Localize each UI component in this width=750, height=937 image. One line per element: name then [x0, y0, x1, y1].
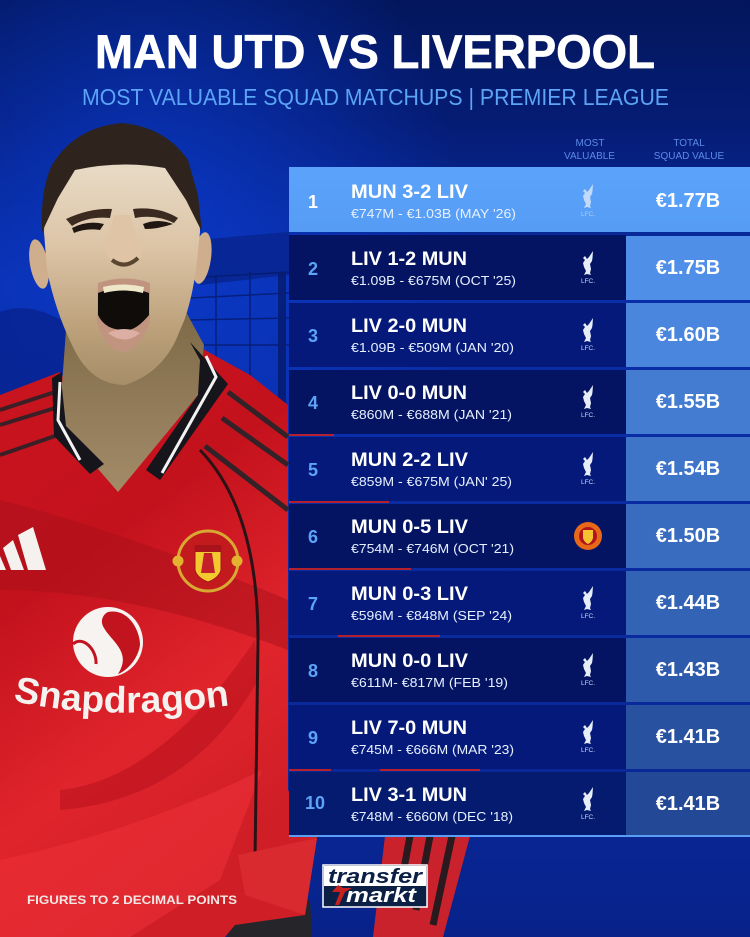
- player: ears: [26, 231, 215, 290]
- row 10: LIV 3-1 MUN: [351, 784, 467, 806]
- row 8: 8: [308, 661, 318, 681]
- column headers: TOTAL: [673, 138, 705, 149]
- row 9: €745M - €666M (MAR '23): [351, 742, 514, 757]
- row 3: €1.60B: [656, 324, 720, 346]
- subtitle: MOST VALUABLE SQUAD MATCHUPS | PREMIER LEAGUE: [82, 84, 669, 110]
- table of matchups: [289, 167, 750, 837]
- row 1: [289, 167, 750, 232]
- row 10: [289, 772, 750, 837]
- row 3: [289, 303, 750, 367]
- row 1: 1: [308, 192, 318, 212]
- title: MAN UTD VS LIVERPOOL: [95, 25, 655, 78]
- row 6: €1.50B: [656, 525, 720, 547]
- player: hair: [42, 123, 202, 232]
- column headers: SQUAD VALUE: [654, 151, 725, 162]
- row 8: [289, 638, 750, 702]
- row 5: [289, 437, 750, 501]
- column headers: [564, 138, 725, 162]
- row 3: 3: [308, 326, 318, 346]
- row 7: €596M - €848M (SEP '24): [351, 608, 512, 623]
- row 6: 6: [308, 527, 318, 547]
- row 2: LIV 1-2 MUN: [351, 248, 467, 270]
- row 2: €1.75B: [656, 257, 720, 279]
- player: brows and eyes: [66, 208, 178, 233]
- player: nose: [105, 215, 142, 262]
- row 5: 5: [308, 460, 318, 480]
- player: neck: [60, 310, 204, 492]
- player: leg: [373, 836, 470, 937]
- column headers: VALUABLE: [564, 151, 615, 162]
- row 4: [289, 370, 750, 434]
- sponsor: Snapdragon logo: [73, 607, 143, 677]
- row 10: 10: [305, 793, 325, 813]
- player: collar: [52, 342, 228, 480]
- icon: Manchester United crest: [574, 522, 602, 550]
- player: mouth: [97, 278, 150, 352]
- row 3: LIV 2-0 MUN: [351, 315, 467, 337]
- row 1: €747M - €1.03B (MAY '26): [351, 206, 516, 221]
- row 8: €1.43B: [656, 659, 720, 681]
- player: shorts: [225, 900, 312, 937]
- row 5: €859M - €675M (JAN' 25): [351, 474, 512, 489]
- row 2: [289, 235, 750, 300]
- player illustration: Snapdragon: [15, 678, 228, 719]
- row 8: €611M- €817M (FEB '19): [351, 675, 508, 690]
- row 4: €860M - €688M (JAN '21): [351, 407, 512, 422]
- row 1: €1.77B: [656, 190, 720, 212]
- footnote: FIGURES TO 2 DECIMAL POINTS: [27, 893, 237, 907]
- player: shirt: [0, 343, 317, 937]
- crest: adidas stripes: [0, 527, 46, 570]
- row 7: €1.44B: [656, 592, 720, 614]
- row 7: [289, 571, 750, 635]
- row 1: MUN 3-2 LIV: [351, 181, 468, 203]
- row 9: €1.41B: [656, 726, 720, 748]
- logo: transfermarkt: [323, 865, 427, 907]
- row 7: 7: [308, 594, 318, 614]
- logo: transfermarkt: markt: [346, 885, 418, 907]
- jersey slivers between rows: [289, 434, 480, 771]
- row 9: 9: [308, 728, 318, 748]
- crest: Manchester United: [172, 531, 242, 591]
- player: head: [44, 148, 200, 385]
- row 3: €1.09B - €509M (JAN '20): [351, 340, 514, 355]
- row 6: €754M - €746M (OCT '21): [351, 541, 514, 556]
- row 10: €1.41B: [656, 793, 720, 815]
- player illustration: [0, 123, 470, 937]
- row 5: €1.54B: [656, 458, 720, 480]
- row 2: €1.09B - €675M (OCT '25): [351, 273, 516, 288]
- column headers: MOST: [576, 138, 604, 149]
- row 7: MUN 0-3 LIV: [351, 583, 468, 605]
- row 4: 4: [308, 393, 318, 413]
- row 9: LIV 7-0 MUN: [351, 717, 467, 739]
- row 9: [289, 705, 750, 769]
- sponsor: Snapdragon wordmark: [13, 701, 232, 713]
- row 4: LIV 0-0 MUN: [351, 382, 467, 404]
- row 4: €1.55B: [656, 391, 720, 413]
- row 2: 2: [308, 259, 318, 279]
- logo: transfermarkt: transfer: [328, 866, 424, 888]
- row 6: [289, 504, 750, 568]
- row 10: €748M - €660M (DEC '18): [351, 809, 513, 824]
- row 5: MUN 2-2 LIV: [351, 449, 468, 471]
- row 8: MUN 0-0 LIV: [351, 650, 468, 672]
- row 6: MUN 0-5 LIV: [351, 516, 468, 538]
